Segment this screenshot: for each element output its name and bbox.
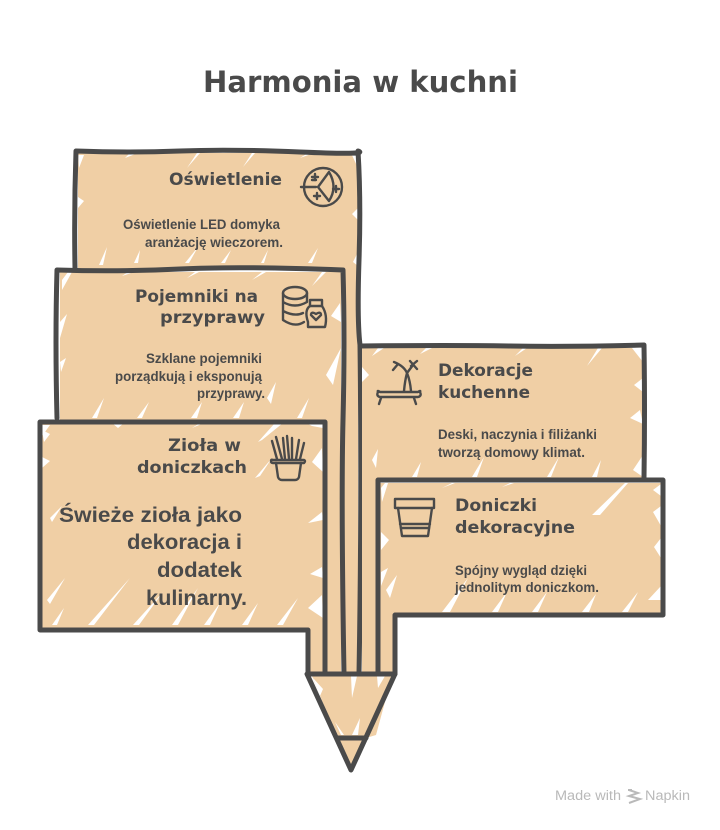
heading: Doniczki dekoracyjne bbox=[455, 496, 575, 538]
text: Zioła description: dekoracja i bbox=[127, 530, 242, 554]
panel: Doniczki dekoracyjne bbox=[378, 480, 663, 676]
heading: Dekoracje kuchenne: kuchenne bbox=[438, 383, 530, 403]
icon: jars bbox=[283, 287, 326, 327]
heading: Dekoracje kuchenne: Dekoracje bbox=[438, 361, 533, 381]
text: Oświetlenie description: aranżację wieczorem. bbox=[145, 235, 283, 250]
text: Pojemniki description: przyprawy. bbox=[197, 386, 265, 401]
text: Dekoracje description: tworzą domowy klimat. bbox=[438, 445, 585, 460]
heading: Zioła w doniczkach bbox=[137, 436, 247, 478]
heading: Zioła w doniczkach: doniczkach bbox=[137, 458, 247, 478]
heading: Pojemniki na przyprawy: przyprawy bbox=[160, 308, 265, 328]
icon: flower pot bbox=[395, 499, 434, 536]
heading: Doniczki dekoracyjne: Doniczki bbox=[455, 496, 537, 516]
text: Zioła description: Świeże zioła jako bbox=[59, 502, 242, 527]
text: Pojemniki description: Szklane pojemniki bbox=[146, 351, 262, 366]
text: Zioła description: kulinarny. bbox=[146, 586, 247, 610]
icon: shelf with branch bbox=[377, 361, 421, 404]
heading: Oświetlenie: Oświetlenie bbox=[169, 170, 282, 190]
text: Doniczki description: Spójny wygląd dzięki bbox=[455, 563, 587, 578]
icon: herb pot bbox=[271, 436, 305, 480]
text: Doniczki description bbox=[454, 563, 599, 595]
text: Doniczki description: jednolitym doniczkom. bbox=[454, 580, 599, 595]
heading: Pojemniki na przyprawy bbox=[135, 287, 265, 328]
title: Harmonia w kuchni bbox=[203, 65, 518, 99]
text: Dekoracje description: Deski, naczynia i filiżanki bbox=[438, 427, 597, 442]
panel: Pojemniki na przyprawy bbox=[56, 268, 344, 676]
footer: Made with Napkin: Napkin bbox=[645, 788, 690, 803]
panel: Zioła w doniczkach bbox=[40, 422, 325, 676]
pencil tip bbox=[307, 674, 395, 770]
text: Pojemniki description: porządkują i eksponują bbox=[115, 369, 262, 384]
panel: Dekoracje kuchenne bbox=[360, 345, 644, 676]
heading: Pojemniki na przyprawy: Pojemniki na bbox=[135, 287, 258, 307]
text: Pojemniki description bbox=[115, 351, 265, 401]
heading: Dekoracje kuchenne bbox=[438, 361, 533, 403]
heading: Zioła w doniczkach: Zioła w bbox=[168, 436, 241, 456]
text: Zioła description: dodatek bbox=[157, 558, 242, 582]
panel: Oświetlenie bbox=[75, 150, 361, 676]
text: Oświetlenie description bbox=[123, 217, 283, 250]
text: Dekoracje description bbox=[438, 427, 597, 460]
icon: Napkin logo bbox=[628, 790, 640, 803]
footer: Made with Napkin: Made with bbox=[555, 788, 621, 803]
footer: Made with Napkin bbox=[555, 788, 690, 803]
text: Zioła description bbox=[59, 502, 247, 610]
icon: moon and stars bbox=[301, 168, 342, 206]
heading: Doniczki dekoracyjne: dekoracyjne bbox=[455, 518, 575, 538]
text: Oświetlenie description: Oświetlenie LED domyka bbox=[123, 217, 280, 232]
